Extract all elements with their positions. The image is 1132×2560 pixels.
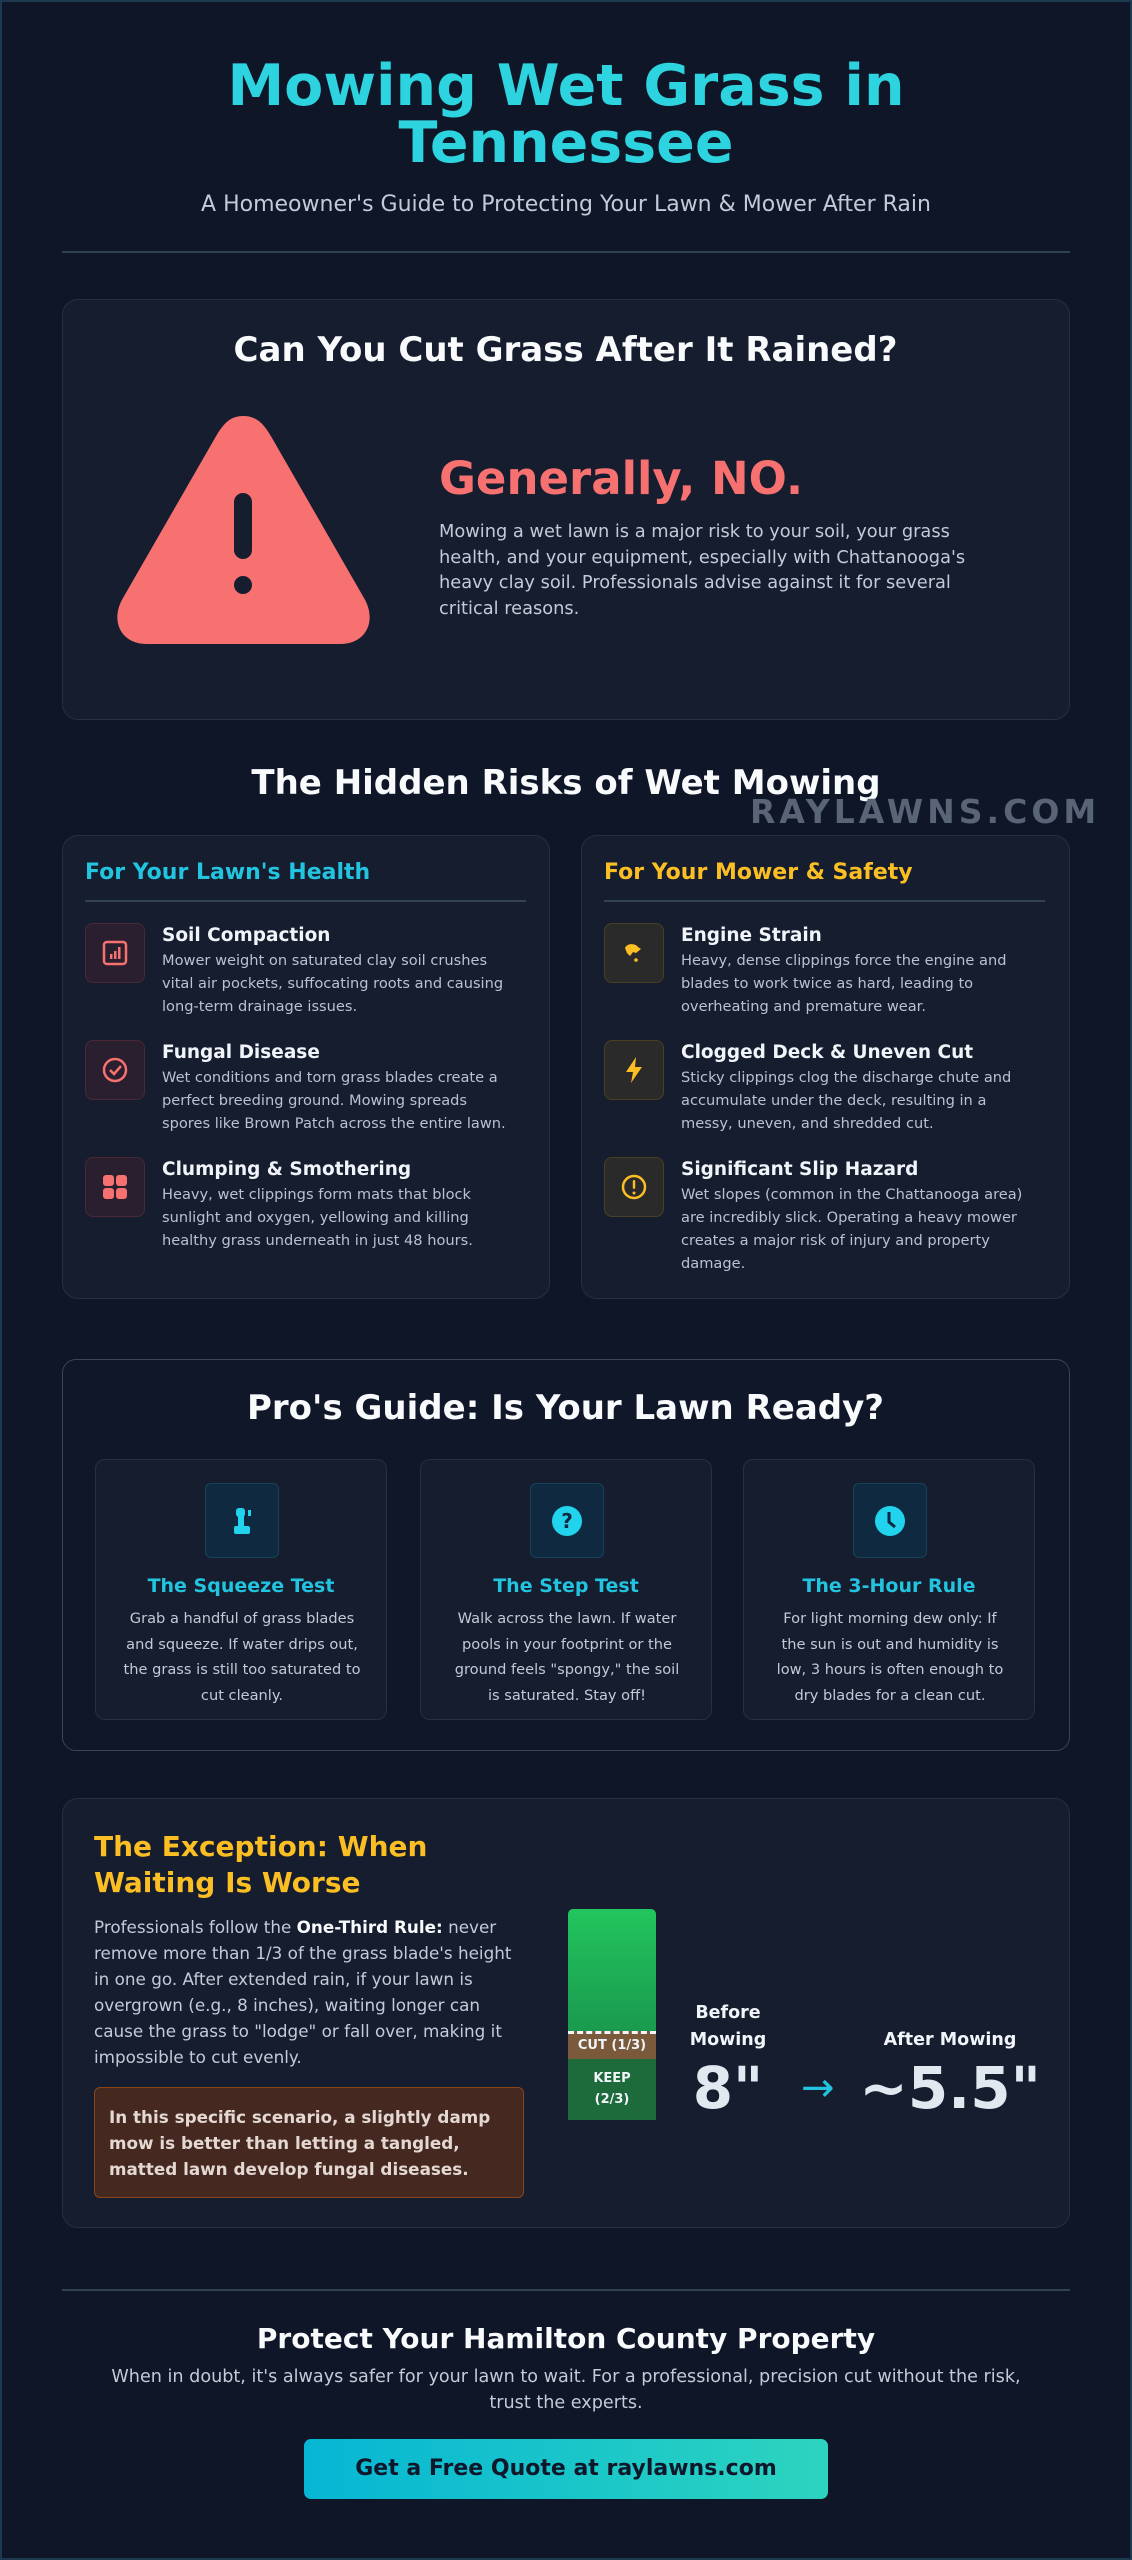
icon: engine	[604, 923, 664, 983]
callout	[94, 2087, 524, 2198]
title: Tennessee	[399, 110, 733, 176]
item: soil compaction: Soil Compaction	[162, 925, 330, 946]
bar chart: one-third rule: CUT (1/3)	[578, 2038, 646, 2053]
item: soil compaction	[85, 923, 503, 1015]
icon: bolt	[604, 1040, 664, 1100]
heading: For Your Mower & Safety	[604, 860, 913, 885]
card: 3-hour rule: For light morning dew only: If the sun is out and humidity is low, 3 hours is often enough to dry blades for a clean cut.	[777, 1610, 1003, 1704]
card: squeeze test	[95, 1459, 387, 1720]
item: slip hazard: Wet slopes (common in the Chattanooga area) are incredibly slick. Operating a heavy mower creates a major risk of injury and property damage.	[681, 1186, 1022, 1272]
icon: clock	[853, 1483, 927, 1558]
footer text	[111, 2367, 1021, 2413]
before label: Before	[695, 2003, 761, 2023]
paragraph: Mowing a wet lawn is a major risk to your soil, your grass health, and your equipment, especially with Chattanooga's heavy clay soil. Professionals advise against it for several critical reasons.	[439, 521, 965, 618]
before label: Mowing	[690, 2030, 766, 2050]
card: squeeze test: The Squeeze Test	[148, 1575, 334, 1597]
footer heading: Protect Your Hamilton County Property	[257, 2322, 875, 2355]
icon: grid	[85, 1157, 145, 1217]
heading: hidden risks: The Hidden Risks of Wet Mowing	[251, 763, 881, 803]
CTA button	[304, 2439, 828, 2499]
heading	[94, 1830, 427, 1899]
heading: Pro's Guide: Is Your Lawn Ready?	[247, 1388, 884, 1428]
icon: question: ?	[561, 1508, 573, 1532]
card: 3-hour rule	[743, 1459, 1035, 1720]
CTA button: Get a Free Quote at raylawns.com	[355, 2456, 777, 2481]
after label: ~5.5"	[859, 2054, 1041, 2122]
item: clumping: Heavy, wet clippings form mats that block sunlight and oxygen, yellowing and killing healthy grass underneath in just 48 hours.	[162, 1186, 473, 1249]
item: fungal disease	[85, 1040, 506, 1132]
item: engine strain: Heavy, dense clippings force the engine and blades to work twice as hard, leading to overheating and premature wear.	[681, 952, 1006, 1015]
title	[227, 53, 905, 176]
item: clogged deck: Clogged Deck & Uneven Cut	[681, 1042, 973, 1063]
item: soil compaction: Mower weight on saturated clay soil crushes vital air pockets, suffocating roots and causing long-term drainage issues.	[162, 952, 503, 1015]
panel: mower safety	[581, 835, 1070, 1299]
icon: fungus	[85, 1040, 145, 1100]
card: 3-hour rule: The 3-Hour Rule	[802, 1575, 976, 1597]
card: step test	[420, 1459, 712, 1720]
bar chart: one-third rule	[568, 1909, 656, 2120]
footer text: trust the experts.	[489, 2393, 643, 2413]
subtitle: A Homeowner's Guide to Protecting Your Lawn & Mower After Rain	[201, 192, 931, 217]
heading: Can You Cut Grass After It Rained?	[234, 330, 897, 370]
card: step test: Walk across the lawn. If water pools in your footprint or the ground feels "spongy," the soil is saturated. Stay off!	[455, 1610, 679, 1704]
panel: lawn health	[62, 835, 550, 1299]
bar chart: one-third rule: KEEP	[593, 2071, 631, 2086]
callout: In this specific scenario, a slightly damp mow is better than letting a tangled, matted lawn develop fungal diseases.	[109, 2107, 490, 2179]
item: slip hazard	[604, 1157, 1022, 1272]
watermark: RAYLAWNS.COM	[750, 792, 1100, 831]
icon: hand	[205, 1483, 279, 1558]
heading: For Your Lawn's Health	[85, 860, 370, 885]
item: clogged deck	[604, 1040, 1011, 1132]
item: fungal disease: Fungal Disease	[162, 1042, 320, 1063]
panel: pro's guide	[62, 1359, 1070, 1751]
item: slip hazard: Significant Slip Hazard	[681, 1159, 918, 1180]
icon: question	[530, 1483, 604, 1558]
answer: Generally, NO.	[439, 452, 803, 505]
after label: After Mowing	[884, 2030, 1016, 2050]
icon: chart	[85, 923, 145, 983]
panel: can you cut grass	[62, 299, 1070, 720]
arrow: →	[801, 2065, 835, 2111]
title: Mowing Wet Grass in	[227, 53, 905, 119]
item: fungal disease: Wet conditions and torn grass blades create a perfect breeding ground. Mowing spreads spores like Brown Patch across the entire lawn.	[162, 1069, 506, 1132]
item: engine strain: Engine Strain	[681, 925, 822, 946]
item: clumping	[85, 1157, 473, 1249]
icon: alert	[604, 1157, 664, 1217]
item: engine strain	[604, 923, 1006, 1015]
paragraph: Professionals follow the One-Third Rule: never remove more than 1/3 of the grass blade's height in one go. After extended rain, if your lawn is overgrown (e.g., 8 inches), waiting longer can cause the grass to "lodge" or fall over, making it impossible to cut evenly.	[94, 1917, 511, 2067]
icon: warning triangle	[117, 416, 370, 644]
heading: Waiting Is Worse	[94, 1866, 361, 1899]
bar chart: one-third rule: (2/3)	[595, 2092, 629, 2107]
before label	[690, 2003, 766, 2122]
card: step test: The Step Test	[493, 1575, 639, 1597]
panel: exception	[62, 1798, 1070, 2228]
item: clumping: Clumping & Smothering	[162, 1159, 411, 1180]
footer text: When in doubt, it's always safer for your lawn to wait. For a professional, precision cut without the risk,	[111, 2367, 1021, 2387]
before label: 8"	[693, 2054, 763, 2122]
heading: The Exception: When	[94, 1830, 427, 1863]
card: squeeze test: Grab a handful of grass blades and squeeze. If water drips out, the grass is still too saturated to cut cleanly.	[124, 1610, 360, 1704]
item: clogged deck: Sticky clippings clog the discharge chute and accumulate under the deck, resulting in a messy, uneven, and shredded cut.	[681, 1069, 1011, 1132]
